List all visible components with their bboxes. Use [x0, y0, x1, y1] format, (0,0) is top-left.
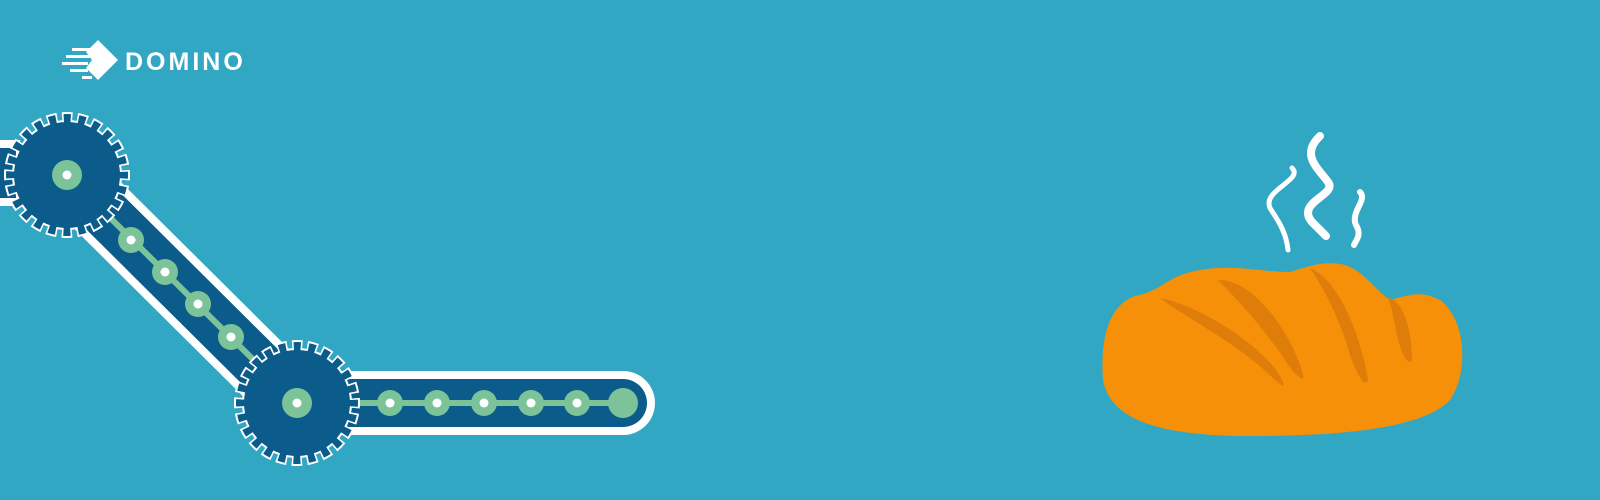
logo text: DOMINO	[125, 48, 246, 76]
icon: steam	[1269, 136, 1362, 250]
icon: bread loaf	[1102, 263, 1462, 436]
horizontal belt	[297, 371, 655, 435]
chain lines	[67, 175, 297, 403]
chain links	[118, 227, 638, 418]
logo: Domino	[62, 40, 246, 80]
conveyor machine	[0, 119, 655, 459]
icon: logo diamond	[62, 40, 118, 80]
gear: top	[11, 119, 123, 231]
diagonal belt	[44, 152, 319, 426]
gear: bottom	[241, 347, 353, 459]
left stub belt	[0, 140, 20, 206]
